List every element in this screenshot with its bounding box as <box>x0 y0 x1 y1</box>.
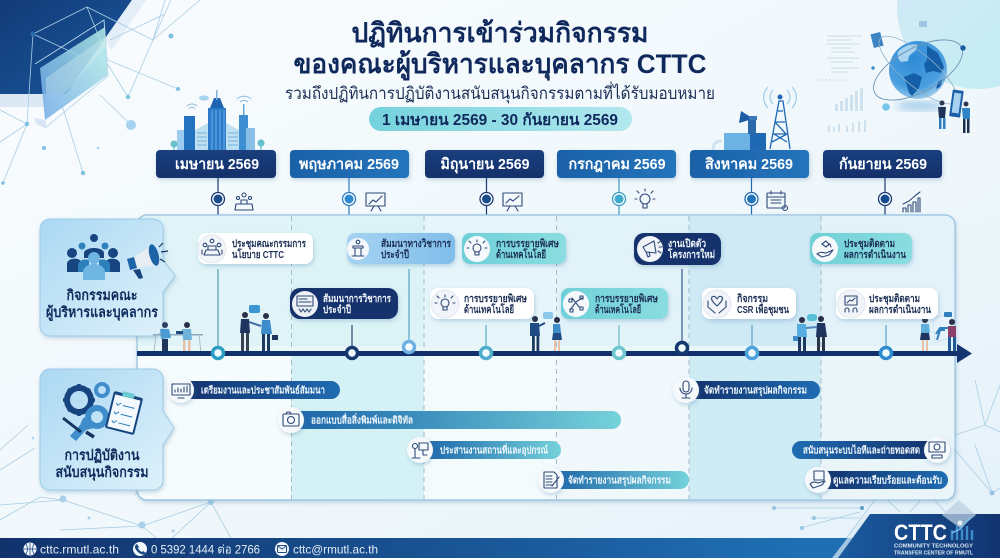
month header row <box>156 150 942 178</box>
subtitle: รวมถึงปฏิทินการปฏิบัติงานสนับสนุนกิจกรรมตามที่ได้รับมอบหมาย <box>285 81 715 104</box>
panel heading: executives and staff <box>46 287 158 321</box>
card: annual academic seminar (top): ประจำปี <box>381 248 409 261</box>
panel heading: support work: การปฏิบัติงาน <box>64 447 140 464</box>
panel heading: executives and staff: กิจกรรมคณะ <box>66 287 138 304</box>
decoration: top-right globe illustration <box>817 0 1000 133</box>
card: special lecture teal July <box>561 288 668 319</box>
icon: city skyline <box>170 90 265 150</box>
month: April: เมษายน 2569 <box>175 156 259 173</box>
logo: CTTC <box>832 500 1000 558</box>
bar: print and digital media design: ออกแบบสื่อสิ่งพิมพ์และดิจิทัล <box>311 412 413 426</box>
main timeline panel <box>137 215 955 500</box>
bar: print and digital media design <box>278 407 621 433</box>
card: annual academic seminar (navy) <box>290 288 398 319</box>
bar: IT and live broadcast support: สนับสนุนระบบไอทีและถ่ายทอดสด <box>803 444 920 456</box>
card: special lecture teal June: ด้านเทคโนโลยี <box>496 248 546 261</box>
figures: handshake <box>240 305 278 351</box>
bar: hospitality and reception <box>805 467 948 493</box>
panel: executive activities label <box>40 219 175 336</box>
card: CSR activity <box>702 288 796 319</box>
card: follow-up meeting teal <box>810 233 912 264</box>
figures: table meeting <box>153 322 203 352</box>
month: May: พฤษภาคม 2569 <box>299 156 399 173</box>
card: follow-up meeting white: ผลการดำเนินงาน <box>869 304 932 316</box>
card: annual academic seminar (navy): สัมมนาการวิชาการ <box>323 293 391 305</box>
card: special lecture white: ด้านเทคโนโลยี <box>464 303 514 316</box>
website contact: cttc.rmutl.ac.th <box>40 542 119 556</box>
icon: group of people <box>67 234 120 280</box>
logo: CTTC: CTTC <box>894 520 947 545</box>
bar: activity summary report (bottom) <box>538 467 689 493</box>
phone contact: 0 5392 1444 ต่อ 2766 <box>151 542 260 556</box>
logo: CTTC: TRANSFER CENTER OF RMUTL <box>894 550 974 556</box>
bar: venue and equipment coordination <box>407 437 561 463</box>
card: special lecture white <box>430 288 534 319</box>
bar: preparation and publicity: เตรียมงานและประชาสัมพันธ์สัมมนา <box>201 384 325 396</box>
month connectors and small icons <box>212 178 920 215</box>
icon: tower and broadcast <box>713 87 796 150</box>
card: follow-up meeting white: ประชุมติดตาม <box>869 293 920 306</box>
date range pill: 1 เมษายน 2569 - 30 กันยายน 2569 <box>382 111 618 129</box>
figures: handshake in August <box>793 314 827 352</box>
icon: gears, tools and checklist <box>63 384 144 441</box>
timeline axis arrow <box>137 344 972 363</box>
card: special lecture white: การบรรยายพิเศษ <box>464 293 527 305</box>
month: July: กรกฎาคม 2569 <box>568 156 666 173</box>
date range pill <box>369 107 632 131</box>
title: ปฏิทินการเข้าร่วมกิจกรรม <box>352 18 648 48</box>
bar: venue and equipment coordination: ประสานงานสถานที่และอุปกรณ์ <box>440 442 549 456</box>
panel heading: executives and staff: ผู้บริหารและบุคลากร <box>46 304 158 321</box>
month: June: มิถุนายน 2569 <box>440 155 530 174</box>
card: follow-up meeting white <box>836 288 938 319</box>
month: September: กันยายน 2569 <box>839 156 927 173</box>
title line 2: ของคณะผู้บริหารและบุคลากร CTTC <box>294 49 706 81</box>
month: August: สิงหาคม 2569 <box>705 155 793 173</box>
bar: preparation and publicity <box>168 377 340 403</box>
panel heading: support work <box>56 447 148 481</box>
card: special lecture teal June <box>462 233 566 264</box>
decoration: bottom and side network lines <box>0 380 1000 545</box>
card: CSR activity: CSR เพื่อชุมชน <box>737 301 790 317</box>
card: new project launch: โครงการใหม่ <box>667 247 715 261</box>
figures: conversation in June <box>530 312 562 352</box>
card: follow-up meeting teal: ผลการดำเนินงาน <box>844 249 907 261</box>
card: special lecture teal July: ด้านเทคโนโลยี <box>595 303 641 316</box>
timeline stems <box>218 269 886 353</box>
card: new project launch: งานเปิดตัว <box>668 238 706 250</box>
bar: activity summary report (August) <box>673 377 820 403</box>
card: policy committee meeting: ประชุมคณะกรรมการ <box>232 238 306 251</box>
panel heading: support work: สนับสนุนกิจกรรม <box>56 464 148 481</box>
card: annual academic seminar (top) <box>347 233 455 264</box>
panel: support work label <box>40 369 174 490</box>
timeline nodes <box>212 342 892 358</box>
card: annual academic seminar (top): สัมมนาทางวิชาการ <box>381 238 451 250</box>
footer bar <box>0 538 1000 558</box>
bar: activity summary report (bottom): จัดทำรายงานสรุปผลกิจกรรม <box>568 474 671 486</box>
card: policy committee meeting: นโยบาย CTTC <box>232 248 284 261</box>
title <box>294 18 706 81</box>
card: annual academic seminar (navy): ประจำปี <box>323 303 351 316</box>
card: special lecture teal June: การบรรยายพิเศษ <box>496 238 559 250</box>
card: special lecture teal July: การบรรยายพิเศษ <box>595 293 658 305</box>
card: policy committee meeting <box>198 233 313 264</box>
bar: activity summary report (August): จัดทำรายงานสรุปผลกิจกรรม <box>704 384 807 396</box>
card: CSR activity: กิจกรรม <box>736 293 768 305</box>
email contact: cttc@rmutl.ac.th <box>293 542 378 556</box>
card: follow-up meeting teal: ประชุมติดตาม <box>844 238 895 251</box>
bar: IT and live broadcast support <box>792 437 950 463</box>
decoration: top-left corner graphic <box>0 0 200 185</box>
card: new project launch <box>634 233 721 265</box>
logo: CTTC: COMMUNITY TECHNOLOGY <box>894 544 973 550</box>
bar: hospitality and reception: ดูแลความเรียบร้อยและต้อนรับ <box>833 474 942 488</box>
icon: megaphone <box>127 243 168 279</box>
figures: September presentation <box>920 312 956 352</box>
